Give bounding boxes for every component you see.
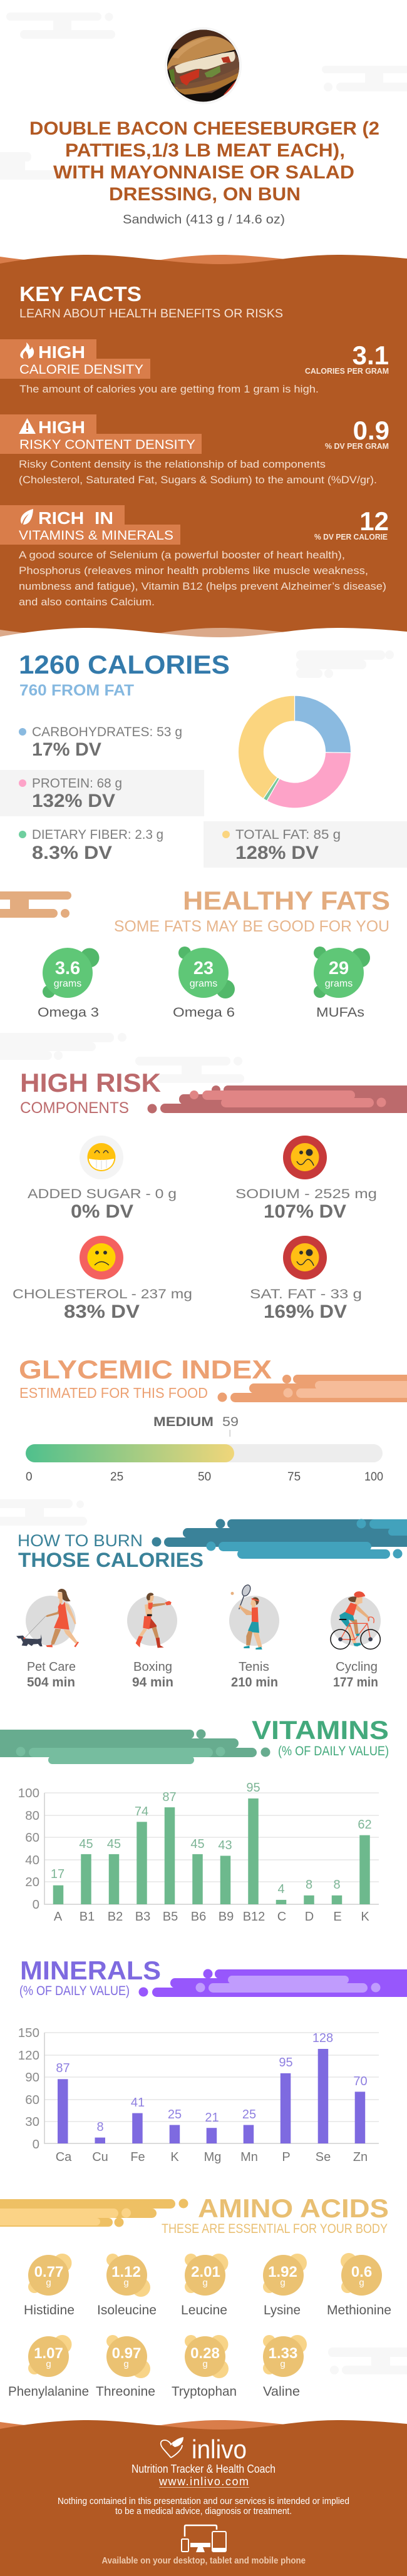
label: pet care: Pet Care bbox=[27, 1660, 76, 1674]
fact: calorie density: CALORIE DENSITY bbox=[19, 362, 143, 377]
legend: carbohydrates: CARBOHYDRATES: 53 g bbox=[32, 725, 182, 739]
legend: dietary fiber: DIETARY FIBER: 2.3 g bbox=[32, 828, 163, 842]
amino: methionine bbox=[327, 2253, 391, 2317]
fact: rich in vitamins and minerals: VITAMINS & MINERALS bbox=[19, 528, 173, 543]
amino: phenylalanine bbox=[8, 2335, 89, 2399]
bar chart: vitamins: C bbox=[277, 1910, 286, 1924]
fact: risky content density: 0.9 bbox=[353, 416, 389, 445]
amino: valine: Valine bbox=[263, 2384, 300, 2399]
amino: lysine bbox=[263, 2254, 307, 2317]
bar chart: vitamins: B6 bbox=[191, 1910, 206, 1924]
legend: carbohydrates bbox=[19, 725, 182, 760]
risk: added sugar: ADDED SUGAR - 0 g bbox=[28, 1187, 177, 1201]
icon: warning triangle bbox=[19, 418, 36, 434]
icon: flame bbox=[20, 342, 34, 359]
bar chart: minerals: P bbox=[282, 2150, 291, 2164]
amino: threonine bbox=[96, 2335, 155, 2399]
bar chart: vitamins: 60 bbox=[25, 1830, 39, 1845]
bar chart: vitamins: 8 bbox=[333, 1878, 341, 1892]
heading: vitamins: VITAMINS bbox=[252, 1715, 389, 1745]
amino: phenylalanine: 1.07 bbox=[34, 2345, 63, 2362]
label: tennis: Tenis bbox=[239, 1660, 269, 1674]
gauge label: medium 59 bbox=[153, 1415, 239, 1437]
fact: calorie density: HIGH bbox=[38, 342, 85, 362]
bar chart: vitamins: D bbox=[305, 1910, 314, 1924]
subheading: healthy fats: SOME FATS MAY BE GOOD FOR YOU bbox=[114, 918, 389, 935]
badge: omega 6: 23 bbox=[193, 958, 214, 978]
amino: leucine: 2.01 bbox=[191, 2264, 220, 2281]
amino: leucine bbox=[181, 2254, 228, 2317]
disclaimer: Nothing contained in this presentation and our services is intended or implied bbox=[58, 2496, 349, 2507]
amino: threonine: g bbox=[123, 2359, 129, 2369]
subheading: components: COMPONENTS bbox=[20, 1099, 129, 1117]
bar chart: minerals: 95 bbox=[279, 2056, 293, 2070]
fact: risky content density: RISKY CONTENT DENSITY bbox=[19, 438, 195, 452]
bar chart: vitamins: 20 bbox=[25, 1875, 39, 1889]
legend: protein bbox=[19, 776, 122, 811]
gauge scale: 0 bbox=[26, 1470, 33, 1484]
bar chart: minerals: Mn bbox=[240, 2150, 258, 2164]
badge: omega 3: grams bbox=[54, 978, 81, 989]
fact: risky content density: HIGH bbox=[38, 418, 85, 437]
fact: rich in vitamins and minerals: RICH IN bbox=[38, 508, 113, 528]
heading: those calories: THOSE CALORIES bbox=[18, 1549, 204, 1571]
amino: histidine bbox=[24, 2254, 75, 2317]
bar chart: minerals bbox=[18, 2026, 379, 2164]
bar chart: vitamins: 43 bbox=[218, 1839, 232, 1852]
logo: inlivo wordmark: inlivo bbox=[192, 2435, 247, 2464]
bar chart: minerals: 25 bbox=[242, 2108, 256, 2122]
gauge scale: 75 bbox=[287, 1470, 301, 1484]
bar chart: vitamins: 87 bbox=[162, 1790, 177, 1804]
amino: isoleucine bbox=[97, 2254, 157, 2317]
bar chart: minerals: 0 bbox=[33, 2137, 39, 2152]
heading: key facts: KEY FACTS bbox=[19, 282, 142, 305]
label: cycling: Cycling bbox=[336, 1660, 378, 1674]
bar chart: vitamins: 95 bbox=[246, 1781, 260, 1795]
subheading: calories from fat: 760 FROM FAT bbox=[19, 682, 134, 699]
risk: sodium bbox=[235, 1136, 377, 1222]
gauge scale: 50 bbox=[198, 1470, 211, 1484]
fact: calorie density: 3.1 bbox=[353, 341, 389, 370]
gauge scale: 100 bbox=[364, 1470, 383, 1484]
legend: dietary fiber: 8.3% DV bbox=[32, 843, 112, 863]
bar chart: minerals: 128 bbox=[312, 2031, 333, 2045]
legend: protein: 132% DV bbox=[32, 791, 115, 811]
food photo: burger bbox=[165, 28, 242, 104]
disclaimer bbox=[58, 2496, 349, 2517]
amino: phenylalanine: g bbox=[46, 2359, 51, 2369]
donut chart bbox=[238, 695, 351, 808]
legend: protein: PROTEIN: 68 g bbox=[32, 776, 122, 791]
panel: amino acids bbox=[0, 2194, 391, 2399]
risk: cholesterol bbox=[13, 1236, 192, 1322]
heading: healthy fats: HEALTHY FATS bbox=[183, 886, 390, 915]
badge: MUFAs: 29 bbox=[329, 958, 349, 978]
logo: inlivo heart bbox=[161, 2437, 183, 2458]
panel: minerals bbox=[18, 1956, 407, 2164]
activity: tennis bbox=[229, 1584, 279, 1650]
fact: rich in vitamins and minerals: numbness and fatigue), Vitamin B12 (helps prevent Alzheimer’s disease) bbox=[19, 580, 386, 592]
bar chart: vitamins: 80 bbox=[25, 1809, 39, 1823]
gauge label: medium 59: 59 bbox=[222, 1415, 239, 1429]
badge: omega 6: grams bbox=[190, 978, 217, 989]
bar chart: minerals: 60 bbox=[25, 2093, 39, 2107]
bar chart: vitamins: E bbox=[333, 1910, 342, 1924]
tagline: Nutrition Tracker & Health Coach bbox=[131, 2463, 276, 2475]
bar chart: vitamins: 45 bbox=[79, 1837, 93, 1851]
bar chart: minerals: Zn bbox=[353, 2150, 368, 2164]
value: cycling: 177 min bbox=[333, 1675, 378, 1690]
footer bbox=[0, 2420, 407, 2576]
subheading: minerals: (% OF DAILY VALUE) bbox=[19, 1984, 130, 1998]
amino: valine: g bbox=[280, 2359, 286, 2369]
subheading: glycemic index: ESTIMATED FOR THIS FOOD bbox=[19, 1385, 208, 1401]
title: PATTIES,1/3 LB MEAT EACH), bbox=[65, 140, 345, 161]
risk: saturated fat bbox=[250, 1236, 362, 1322]
legend: dietary fiber bbox=[19, 828, 163, 863]
fact: risky content density bbox=[0, 414, 389, 486]
amino: histidine: g bbox=[46, 2277, 51, 2288]
bar chart: vitamins: B1 bbox=[80, 1910, 95, 1924]
amino: tryptophan: Tryptophan bbox=[172, 2384, 237, 2399]
amino: histidine: 0.77 bbox=[34, 2264, 63, 2281]
bar chart: vitamins: K bbox=[361, 1910, 369, 1924]
title: DOUBLE BACON CHEESEBURGER (2 bbox=[29, 118, 379, 139]
risk: cholesterol: 83% DV bbox=[64, 1301, 140, 1322]
fact: calorie density: CALORIES PER GRAM bbox=[305, 366, 389, 376]
panel: calories bbox=[0, 650, 407, 868]
bar chart: minerals: Ca bbox=[56, 2150, 72, 2164]
amino: isoleucine: g bbox=[123, 2277, 129, 2288]
risk: sodium: SODIUM - 2525 mg bbox=[235, 1187, 377, 1201]
heading: high risk: HIGH RISK bbox=[20, 1068, 161, 1097]
label: boxing: Boxing bbox=[133, 1660, 172, 1674]
bar chart: minerals: 120 bbox=[18, 2048, 39, 2063]
amino: lysine: g bbox=[280, 2277, 286, 2288]
amino: tryptophan bbox=[172, 2335, 237, 2399]
amino: tryptophan: g bbox=[202, 2359, 208, 2369]
amino: leucine: Leucine bbox=[181, 2303, 227, 2317]
bar chart: minerals: 21 bbox=[205, 2111, 219, 2125]
bar chart: minerals: Se bbox=[316, 2150, 331, 2164]
panel: healthy fats bbox=[0, 886, 390, 1020]
bar chart: minerals: 25 bbox=[168, 2108, 182, 2122]
heading: minerals: MINERALS bbox=[20, 1956, 161, 1985]
title: WITH MAYONNAISE OR SALAD bbox=[53, 162, 354, 183]
fact: rich in vitamins and minerals: and also contains Calcium. bbox=[19, 596, 155, 608]
bar chart: minerals: 41 bbox=[131, 2096, 145, 2110]
bar chart: minerals: 150 bbox=[18, 2026, 39, 2040]
panel: key facts bbox=[0, 255, 407, 642]
icon: devices bbox=[182, 2525, 226, 2552]
panel: high risk components bbox=[13, 1068, 407, 1322]
bar chart: vitamins: B9 bbox=[219, 1910, 234, 1924]
fact: calorie density: The amount of calories you are getting from 1 gram is high. bbox=[19, 383, 319, 395]
bar chart: minerals: Cu bbox=[92, 2150, 108, 2164]
legend: carbohydrates: 17% DV bbox=[32, 739, 101, 760]
bar chart: minerals: 30 bbox=[25, 2115, 39, 2129]
amino: isoleucine: Isoleucine bbox=[97, 2303, 157, 2317]
amino: valine: 1.33 bbox=[269, 2345, 297, 2362]
badge: omega 3 bbox=[38, 948, 99, 1020]
panel: glycemic index bbox=[19, 1355, 407, 1484]
disclaimer: to be a medical advice, diagnosis or treatment. bbox=[115, 2506, 292, 2517]
legend: total fat: 128% DV bbox=[235, 843, 319, 863]
gauge scale: 25 bbox=[110, 1470, 123, 1484]
risk: saturated fat: 169% DV bbox=[264, 1301, 347, 1322]
heading: how to burn: HOW TO BURN bbox=[18, 1531, 143, 1550]
badge: MUFAs: MUFAs bbox=[316, 1005, 364, 1020]
amino: histidine: Histidine bbox=[24, 2303, 75, 2317]
bar chart: vitamins: A bbox=[54, 1910, 63, 1924]
panel: vitamins bbox=[0, 1715, 389, 1924]
risk: sodium: 107% DV bbox=[264, 1201, 346, 1222]
amino: lysine: Lysine bbox=[264, 2303, 301, 2317]
fact: rich in vitamins and minerals: % DV PER CALORIE bbox=[314, 532, 388, 541]
bar chart: vitamins: B12 bbox=[243, 1910, 265, 1924]
amino: leucine: g bbox=[202, 2277, 208, 2288]
bar chart: minerals: K bbox=[170, 2150, 179, 2164]
bar chart: vitamins: B2 bbox=[108, 1910, 123, 1924]
heading: glycemic index: GLYCEMIC INDEX bbox=[19, 1355, 272, 1384]
risk: saturated fat: SAT. FAT - 33 g bbox=[250, 1287, 362, 1301]
value: pet care: 504 min bbox=[27, 1675, 75, 1690]
badge: omega 3: 3.6 bbox=[55, 958, 80, 978]
bar chart: vitamins: 40 bbox=[25, 1853, 39, 1867]
panel: how to burn those calories bbox=[16, 1519, 407, 1690]
gauge scale bbox=[26, 1470, 383, 1484]
fact: rich in vitamins and minerals: 12 bbox=[359, 506, 389, 536]
title bbox=[29, 118, 379, 205]
website: www.inlivo.com bbox=[158, 2475, 249, 2488]
value: boxing: 94 min bbox=[132, 1675, 173, 1690]
bar chart: vitamins: B5 bbox=[163, 1910, 178, 1924]
serving size: Sandwich (413 g / 14.6 oz) bbox=[123, 213, 285, 227]
badge: MUFAs: grams bbox=[325, 978, 353, 989]
badge: omega 6 bbox=[173, 947, 235, 1020]
availability note: Available on your desktop, tablet and mobile phone bbox=[101, 2555, 306, 2566]
amino: methionine: Methionine bbox=[327, 2303, 391, 2317]
heading: amino acids: AMINO ACIDS bbox=[198, 2194, 389, 2223]
bar chart: vitamins: 8 bbox=[306, 1878, 312, 1892]
bar chart: vitamins: 45 bbox=[190, 1837, 205, 1851]
activity: cycling bbox=[331, 1591, 381, 1649]
bar chart: minerals: 87 bbox=[56, 2061, 70, 2075]
bar chart: minerals: 70 bbox=[353, 2075, 368, 2088]
amino: threonine: 0.97 bbox=[112, 2345, 141, 2362]
heading: calories: 1260 CALORIES bbox=[19, 650, 230, 679]
subheading: key facts: LEARN ABOUT HEALTH BENEFITS OR RISKS bbox=[19, 307, 283, 321]
fact: risky content density: Risky Content density is the relationship of bad components bbox=[19, 458, 326, 470]
badge: omega 3: Omega 3 bbox=[38, 1005, 99, 1020]
badge: omega 6: Omega 6 bbox=[173, 1005, 235, 1020]
bar chart: vitamins: 0 bbox=[33, 1897, 39, 1912]
risk: added sugar: 0% DV bbox=[71, 1201, 133, 1222]
amino: phenylalanine: Phenylalanine bbox=[8, 2384, 89, 2399]
bar chart: vitamins: 45 bbox=[107, 1837, 121, 1851]
title: DRESSING, ON BUN bbox=[109, 184, 301, 205]
subheading: vitamins: (% OF DAILY VALUE) bbox=[278, 1744, 389, 1758]
amino: tryptophan: 0.28 bbox=[190, 2345, 220, 2362]
icon: leaf bbox=[21, 509, 33, 525]
activity: boxing bbox=[127, 1593, 177, 1648]
amino: isoleucine: 1.12 bbox=[111, 2264, 141, 2281]
legend: total fat: TOTAL FAT: 85 g bbox=[235, 828, 341, 842]
bar chart: minerals: 90 bbox=[25, 2070, 39, 2085]
bar chart: vitamins: 100 bbox=[18, 1786, 39, 1800]
amino: methionine: g bbox=[359, 2277, 364, 2288]
bar chart: vitamins: 62 bbox=[358, 1818, 372, 1832]
amino: methionine: 0.6 bbox=[351, 2264, 372, 2281]
fact: rich in vitamins and minerals: Phosphorus (releaves minor health problems like muscle weakness, bbox=[19, 565, 368, 577]
fact: risky content density: (Cholesterol, Saturated Fat, Sugars & Sodium) to the amount (%DV/gr). bbox=[19, 474, 377, 486]
bar chart: vitamins: B3 bbox=[135, 1910, 150, 1924]
amino: threonine: Threonine bbox=[96, 2384, 155, 2399]
badge: MUFAs bbox=[314, 947, 370, 1020]
bar chart: vitamins: 74 bbox=[135, 1805, 148, 1819]
fact: rich in vitamins and minerals: A good source of Selenium (a powerful booster of heart health), bbox=[19, 549, 345, 561]
legend: total fat bbox=[222, 828, 341, 863]
amino: valine bbox=[263, 2335, 307, 2399]
bar chart: minerals: Mg bbox=[204, 2150, 221, 2164]
bar chart: vitamins: 17 bbox=[51, 1867, 64, 1881]
activity: pet care bbox=[16, 1589, 79, 1647]
bar chart: minerals: 8 bbox=[96, 2120, 104, 2134]
amino: lysine: 1.92 bbox=[268, 2264, 297, 2281]
gauge bar bbox=[26, 1444, 383, 1462]
bar chart: vitamins bbox=[18, 1781, 379, 1924]
fact: calorie density bbox=[0, 339, 389, 395]
value: tennis: 210 min bbox=[231, 1675, 278, 1690]
fact: risky content density: % DV PER GRAM bbox=[325, 441, 389, 451]
risk: added sugar bbox=[28, 1136, 177, 1222]
fact: rich in vitamins and minerals bbox=[0, 505, 389, 608]
bar chart: minerals: Fe bbox=[130, 2150, 145, 2164]
risk: cholesterol: CHOLESTEROL - 237 mg bbox=[13, 1287, 192, 1301]
bar chart: vitamins: 4 bbox=[277, 1882, 285, 1896]
gauge label: medium 59: MEDIUM bbox=[153, 1415, 214, 1429]
